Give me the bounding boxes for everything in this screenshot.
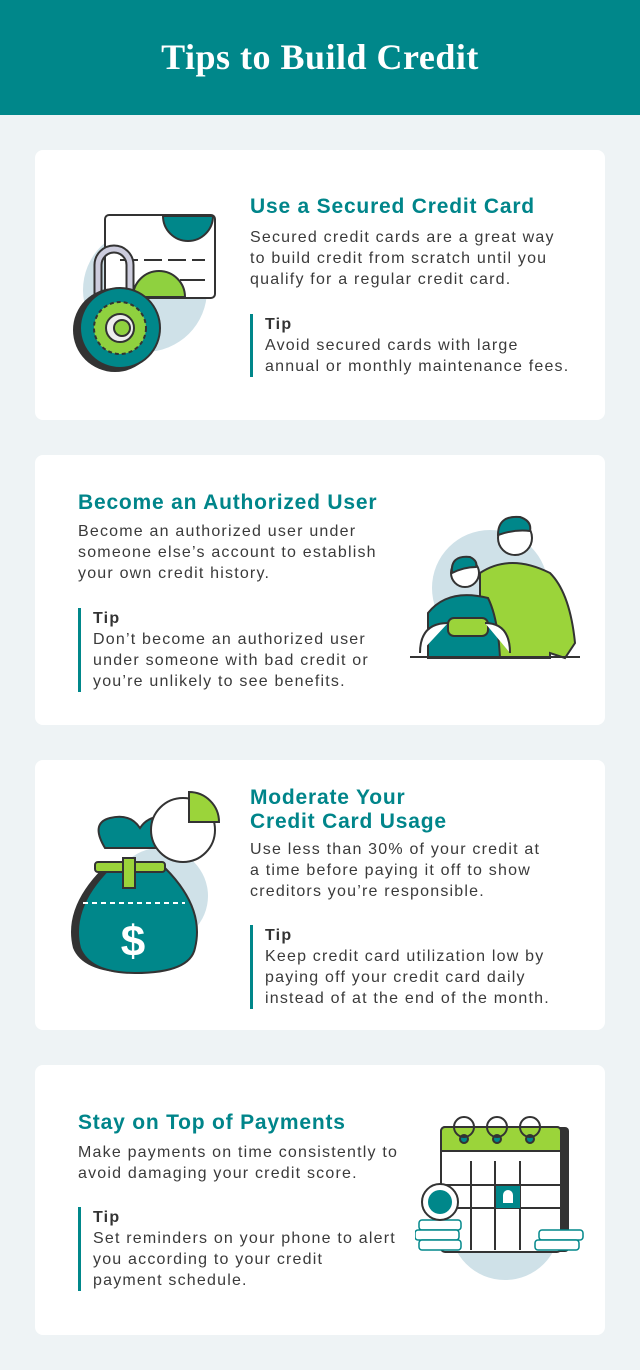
panel: payments: [35, 1065, 605, 1335]
tip: under someone with bad credit or: [93, 652, 369, 669]
heading: Moderate Your: [250, 786, 405, 809]
tip: Tip: [93, 610, 120, 627]
body text: [78, 1144, 398, 1182]
tip: [78, 1207, 396, 1291]
body text: qualify for a regular credit card.: [250, 271, 511, 288]
body text: to build credit from scratch until you: [250, 250, 547, 267]
tip: Avoid secured cards with large: [265, 337, 519, 354]
heading: Stay on Top of Payments: [78, 1111, 346, 1134]
body text: Use less than 30% of your credit at: [250, 841, 540, 858]
tip: Tip: [265, 927, 292, 944]
tip: annual or monthly maintenance fees.: [265, 358, 569, 375]
body text: [250, 229, 555, 288]
heading: Credit Card Usage: [250, 810, 447, 833]
heading: Use a Secured Credit Card: [250, 195, 535, 218]
heading: [250, 786, 447, 833]
tip: [250, 314, 569, 377]
tip: Tip: [93, 1209, 120, 1226]
body text: [250, 841, 540, 900]
icon: calendar and coins: [415, 1116, 584, 1280]
body text: a time before paying it off to show: [250, 862, 531, 879]
tip: Keep credit card utilization low by: [265, 948, 544, 965]
icon: money bag and pie: [71, 791, 220, 974]
body text: Secured credit cards are a great way: [250, 229, 555, 246]
tip: paying off your credit card daily: [265, 969, 526, 986]
tip: [78, 608, 369, 692]
body text: someone else’s account to establish: [78, 544, 377, 561]
tip: you according to your credit: [93, 1251, 323, 1268]
header: [0, 0, 640, 115]
icon: two people: [410, 516, 580, 660]
body text: [78, 523, 377, 582]
panel: authorized user: [35, 455, 605, 725]
body text: your own credit history.: [78, 565, 270, 582]
icon: money bag and pie: $: [121, 917, 145, 966]
tip: Set reminders on your phone to alert: [93, 1230, 396, 1247]
tip: instead of at the end of the month.: [265, 990, 550, 1007]
body text: creditors you’re responsible.: [250, 883, 485, 900]
icon: lock and card: [73, 214, 216, 372]
body text: avoid damaging your credit score.: [78, 1165, 358, 1182]
body text: Make payments on time consistently to: [78, 1144, 398, 1161]
body text: Become an authorized user under: [78, 523, 356, 540]
tip: payment schedule.: [93, 1272, 248, 1289]
header: Tips to Build Credit: [161, 37, 479, 77]
tip: Tip: [265, 316, 292, 333]
tip: Don’t become an authorized user: [93, 631, 366, 648]
panel: secured credit card: [35, 150, 605, 420]
heading: Become an Authorized User: [78, 491, 377, 514]
tip: you’re unlikely to see benefits.: [93, 673, 346, 690]
tip: [250, 925, 550, 1009]
panel: moderate usage: [35, 760, 605, 1030]
